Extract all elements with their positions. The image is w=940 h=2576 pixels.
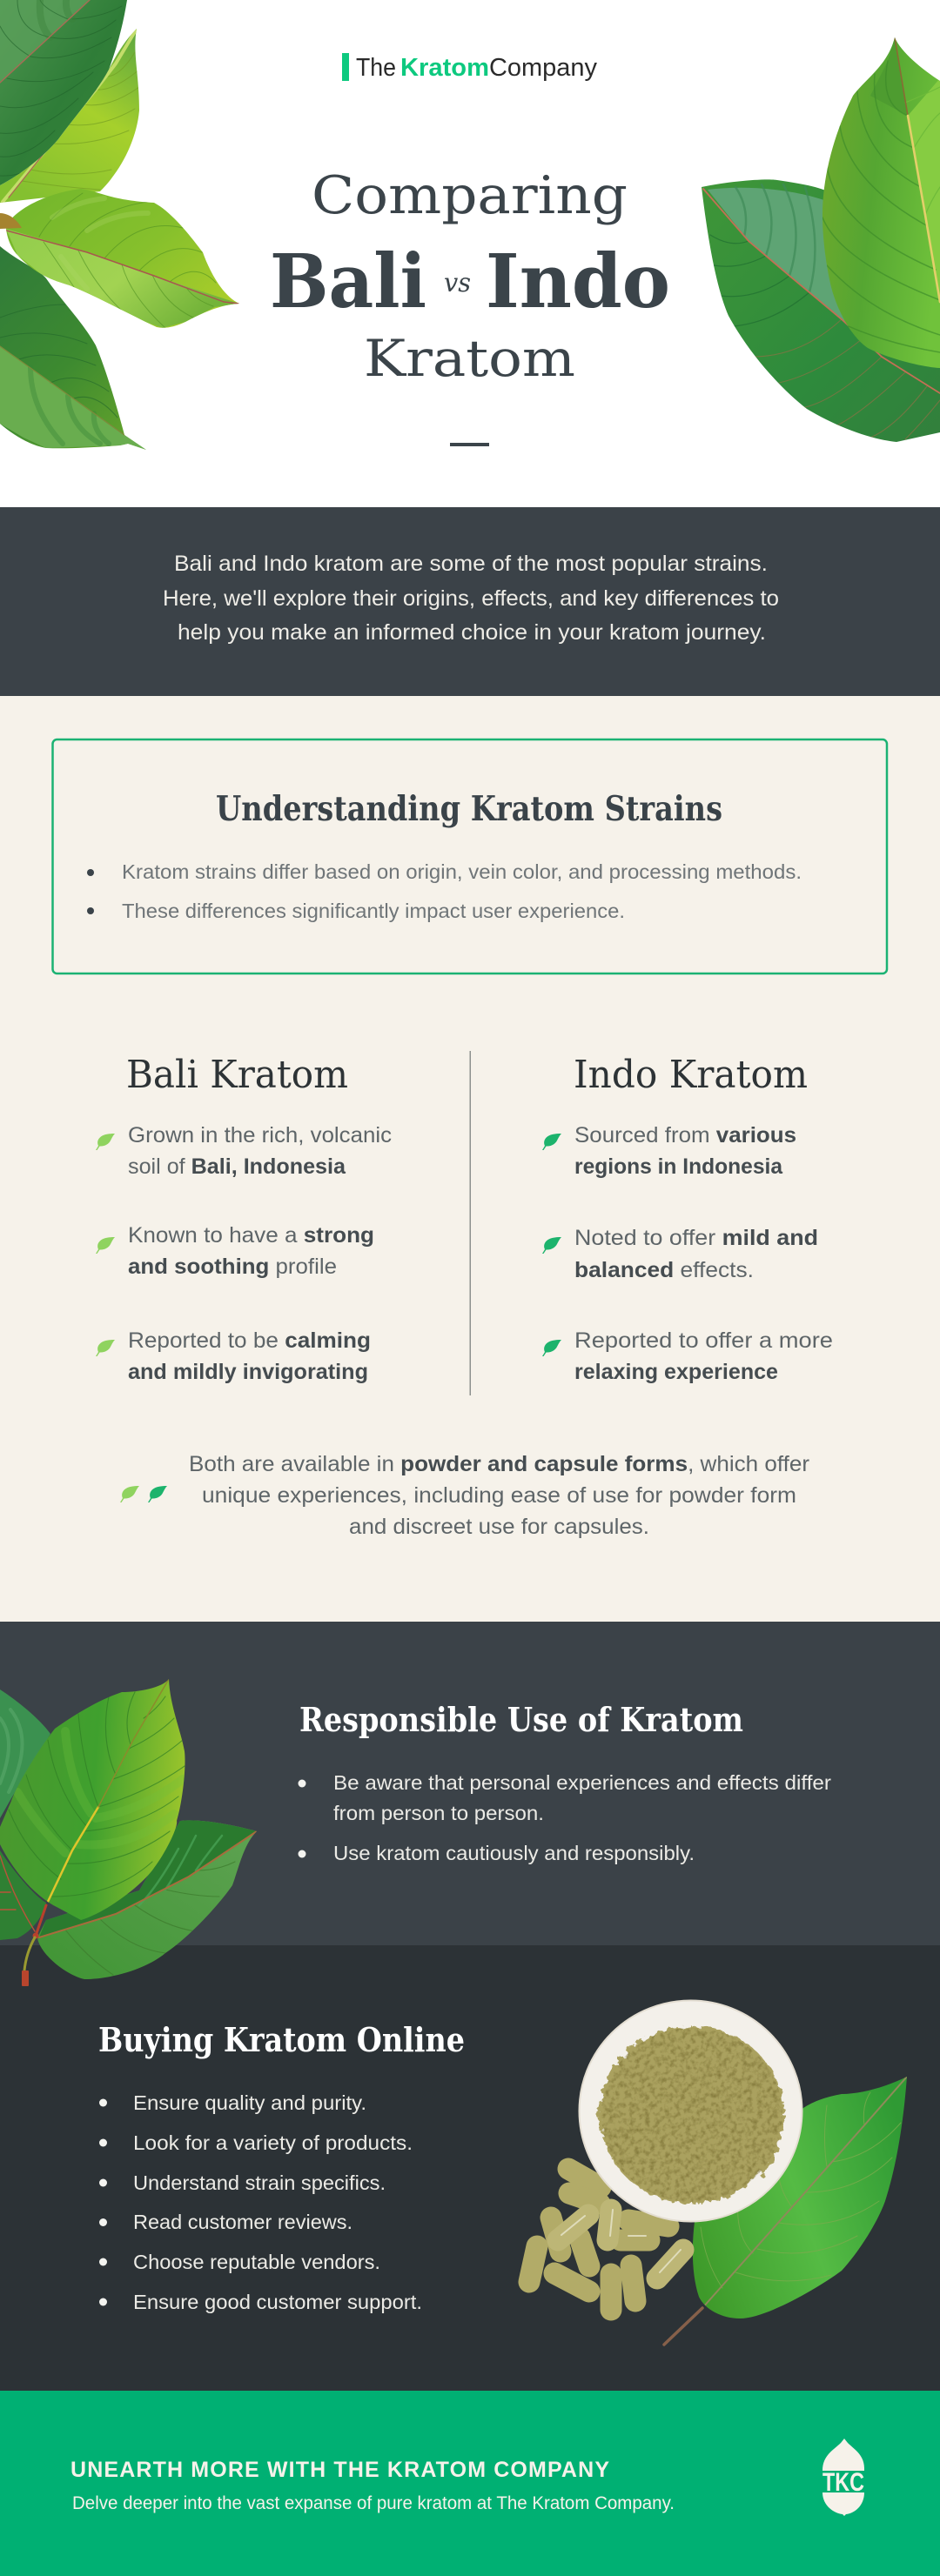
- title: Comparing: [312, 165, 628, 226]
- note text: Both are available in powder and capsule forms , which offer: [189, 1452, 809, 1476]
- comparison panel: [0, 696, 940, 1622]
- main leaf: [0, 1675, 187, 1923]
- bullet list: Choose reputable vendors.: [133, 2251, 380, 2273]
- leaf: front bright green: [818, 35, 940, 370]
- icon: TKC acorn: TKC: [822, 2468, 864, 2497]
- column: bali kratom: [96, 1053, 392, 1384]
- bullet list: These differences significantly impact user experience.: [122, 900, 625, 922]
- item: volcanic soil: Grown in the rich, volcanic: [128, 1123, 392, 1147]
- intro text: [163, 552, 779, 645]
- title: vs: [444, 268, 471, 298]
- stem: [22, 1905, 46, 1986]
- bullet list: [298, 1771, 831, 1864]
- logo: [342, 53, 597, 82]
- item: sourced regions: [542, 1123, 796, 1179]
- panel: buying kratom online: [0, 1945, 940, 2391]
- leaf: light green upper: [0, 26, 144, 204]
- item: volcanic soil: [96, 1123, 392, 1179]
- item: volcanic soil: soil of Bali, Indonesia: [128, 1154, 346, 1179]
- panel: responsible use of kratom: [0, 1622, 940, 1986]
- note text: [189, 1452, 809, 1539]
- title: [270, 165, 670, 388]
- bullet list: Read customer reviews.: [133, 2211, 352, 2233]
- back-left leaf: [0, 1689, 50, 1818]
- item: strong profile: [96, 1223, 374, 1279]
- heading: Indo Kratom: [574, 1053, 808, 1097]
- note text: and discreet use for capsules.: [349, 1515, 649, 1539]
- leaf: lower dark green: [0, 246, 148, 451]
- header panel: [0, 0, 940, 450]
- leaf: back dark green: [702, 178, 940, 444]
- intro band: [0, 507, 940, 696]
- leaf: dark green upper: [0, 0, 131, 187]
- item: mild and balanced: balanced effects.: [574, 1258, 754, 1282]
- item: sourced regions: regions in Indonesia: [574, 1154, 783, 1179]
- leaf bud: [0, 213, 22, 229]
- bowl: [580, 2001, 802, 2222]
- bullet list: Be aware that personal experiences and effects differ: [333, 1771, 831, 1794]
- item: calming: and mildly invigorating: [128, 1360, 368, 1384]
- intro text: Here, we'll explore their origins, effects, and key differences to: [163, 586, 779, 611]
- item: relaxing: relaxing experience: [574, 1360, 778, 1384]
- right leaf cluster: [702, 35, 940, 444]
- lower-right leaf: [35, 1818, 261, 1984]
- left leaf cluster: [0, 0, 244, 451]
- panel: understanding kratom strains: [52, 739, 887, 974]
- item: sourced regions: Sourced from various: [574, 1123, 796, 1147]
- leaf with stem: [664, 2075, 910, 2345]
- bullet list: Kratom strains differ based on origin, vein color, and processing methods.: [122, 860, 802, 883]
- column: indo kratom: [542, 1053, 833, 1384]
- capsules: [529, 2169, 683, 2310]
- bullet list: from person to person.: [333, 1802, 544, 1824]
- bullet list: Ensure quality and purity.: [133, 2091, 366, 2114]
- title: Kratom: [364, 329, 575, 388]
- title: Bali: [270, 238, 426, 325]
- item: calming: Reported to be calming: [128, 1328, 371, 1353]
- bullet list: Understand strain specifics.: [133, 2171, 386, 2194]
- item: mild and balanced: Noted to offer mild and: [574, 1226, 818, 1250]
- logo: Kratom: [400, 54, 489, 82]
- item: strong profile: Known to have a strong: [128, 1223, 374, 1248]
- heading: Understanding Kratom Strains: [216, 789, 722, 829]
- item: strong profile: and soothing profile: [128, 1255, 337, 1279]
- note text: unique experiences, including ease of use for powder form: [202, 1483, 796, 1508]
- heading: Responsible Use of Kratom: [299, 1700, 743, 1739]
- title dash: [450, 443, 489, 446]
- heading: Bali Kratom: [126, 1053, 348, 1097]
- bullet list: Look for a variety of products.: [133, 2131, 413, 2154]
- heading: Buying Kratom Online: [98, 2020, 465, 2059]
- bullet list: Use kratom cautiously and responsibly.: [333, 1842, 695, 1864]
- lower-left leaf: [0, 1850, 46, 1940]
- logo: Company: [489, 54, 597, 82]
- item: relaxing: [542, 1328, 833, 1384]
- product illustration: [529, 2001, 910, 2345]
- intro text: Bali and Indo kratom are some of the most popular strains.: [174, 552, 768, 576]
- icon: TKC acorn: [822, 2439, 864, 2516]
- bullet list: [99, 2091, 422, 2313]
- footer text: Delve deeper into the vast expanse of pure kratom at The Kratom Company.: [72, 2493, 675, 2513]
- item: relaxing: Reported to offer a more: [574, 1328, 833, 1353]
- footer: [0, 2391, 940, 2576]
- bullet list: Ensure good customer support.: [133, 2291, 422, 2313]
- title: Indo: [486, 238, 670, 325]
- bullet list: [87, 860, 802, 922]
- item: calming: [96, 1328, 371, 1384]
- logo: The: [356, 54, 396, 82]
- icon: two leaves: [120, 1486, 167, 1502]
- note: both forms: [120, 1452, 809, 1539]
- footer heading: UNEARTH MORE WITH THE KRATOM COMPANY: [70, 2458, 609, 2482]
- leaf: bright centre: [0, 187, 244, 331]
- intro text: help you make an informed choice in your kratom journey.: [178, 620, 766, 645]
- leaf cluster: [0, 1675, 261, 1986]
- powder: [600, 2026, 784, 2204]
- item: mild and balanced: [542, 1226, 818, 1282]
